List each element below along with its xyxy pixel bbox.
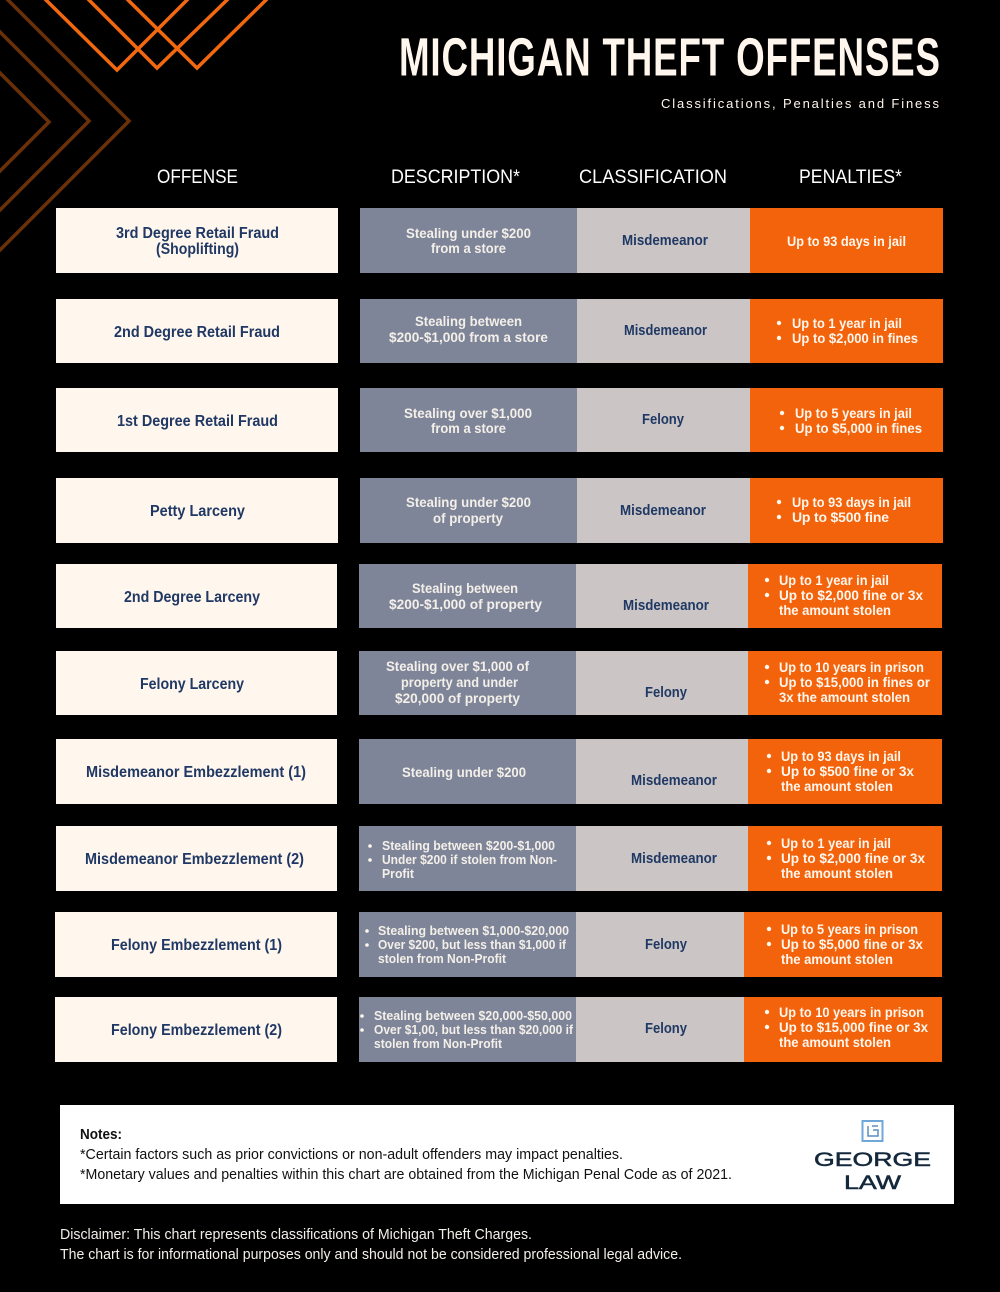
description cell [360, 208, 577, 273]
description cell [359, 912, 576, 977]
classification cell: Misdemeanor [624, 323, 707, 339]
icon: logo square [862, 1121, 882, 1141]
description cell: Stealing under $200 [402, 764, 526, 780]
penalties cell [744, 912, 942, 977]
description cell: $20,000 of property [395, 690, 520, 706]
description cell [359, 826, 576, 891]
description cell: Profit [382, 866, 415, 881]
classification cell [577, 208, 750, 273]
description cell: stolen from Non-Profit [374, 1036, 503, 1051]
offense cell [56, 478, 338, 543]
offense cell: 1st Degree Retail Fraud [117, 413, 278, 430]
description cell: Stealing under $200 [406, 225, 531, 241]
column headers [157, 167, 903, 188]
classification cell: Misdemeanor [620, 503, 706, 519]
description cell [359, 651, 576, 715]
description cell: Stealing between [412, 580, 518, 596]
offense cell: 2nd Degree Retail Fraud [114, 324, 280, 341]
description cell: Over $1,00, but less than $20,000 if [374, 1022, 574, 1037]
description cell: Stealing under $200 [406, 494, 531, 510]
description cell [360, 388, 577, 452]
classification cell [576, 739, 748, 804]
classification cell [577, 299, 750, 363]
offense cell [56, 651, 337, 715]
note 1: *Certain factors such as prior convictions or non-adult offenders may impact penalties. [80, 1147, 623, 1163]
description cell [360, 478, 577, 543]
description cell [359, 564, 576, 628]
penalties cell: Up to 10 years in prison [779, 659, 924, 675]
penalties cell [744, 997, 942, 1062]
penalties cell: the amount stolen [781, 951, 893, 967]
offense cell [56, 388, 338, 452]
penalties cell: the amount stolen [781, 865, 893, 881]
penalties cell: Up to $5,000 fine or 3x [781, 936, 923, 952]
offense cell: 3rd Degree Retail Fraud [116, 225, 279, 242]
classification cell [576, 651, 748, 715]
header: penalties: PENALTIES* [799, 167, 903, 188]
row 10: felony embezzlement 2 [55, 997, 942, 1062]
logo: George Law [814, 1121, 931, 1194]
row 3: 1st degree retail fraud [56, 388, 943, 452]
penalties cell: Up to 5 years in jail [795, 405, 912, 421]
penalties cell: Up to $500 fine or 3x [781, 763, 914, 779]
offense cell [56, 564, 337, 628]
description cell: Stealing between $20,000-$50,000 [374, 1008, 572, 1023]
penalties cell [748, 564, 942, 628]
panel: notes [60, 1105, 954, 1204]
offense cell [55, 997, 337, 1062]
penalties cell: Up to 10 years in prison [779, 1004, 924, 1020]
disclaimer: Disclaimer: This chart represents classifications of Michigan Theft Charges. [60, 1227, 532, 1243]
penalties cell: Up to $2,000 fine or 3x [781, 850, 925, 866]
logo wordmark: George: GEORGE [814, 1150, 931, 1171]
penalties cell: Up to $500 fine [792, 509, 889, 525]
classification cell [577, 478, 750, 543]
header: offense: OFFENSE [157, 167, 238, 188]
offense cell: Petty Larceny [150, 503, 245, 520]
offense cell: Felony Embezzlement (1) [111, 937, 282, 954]
description cell: from a store [431, 420, 506, 436]
row 5: 2nd degree larceny [56, 564, 942, 628]
description cell: stolen from Non-Profit [378, 951, 507, 966]
description cell: Stealing over $1,000 [404, 405, 532, 421]
classification cell [577, 388, 750, 452]
decoration: orange chevrons [45, 0, 267, 70]
classification cell: Felony [645, 1021, 687, 1037]
disclaimer: The chart is for informational purposes only and should not be considered professional legal advice. [60, 1247, 682, 1263]
description cell [359, 739, 576, 804]
classification cell: Felony [642, 412, 684, 428]
decoration: brown chevrons [0, 0, 129, 252]
row 8: misdemeanor embezzlement 2 [56, 826, 942, 891]
row 2: 2nd degree retail fraud [56, 299, 943, 363]
description cell: Over $200, but less than $1,000 if [378, 937, 567, 952]
offense cell: 2nd Degree Larceny [124, 589, 260, 606]
penalties cell [748, 651, 942, 715]
description cell: Stealing between $1,000-$20,000 [378, 923, 569, 938]
disclaimer [60, 1227, 682, 1263]
offense cell [56, 739, 337, 804]
penalties cell [750, 299, 943, 363]
description cell: Stealing between [415, 313, 522, 329]
classification cell: Felony [645, 685, 687, 701]
offense cell [55, 912, 337, 977]
header: description: DESCRIPTION* [391, 167, 521, 188]
notes heading: Notes: [80, 1127, 122, 1143]
row 7: misdemeanor embezzlement 1 [56, 739, 942, 804]
penalties cell: the amount stolen [779, 602, 891, 618]
classification cell: Misdemeanor [623, 598, 709, 614]
description cell: property and under [401, 674, 518, 690]
offense cell [56, 826, 337, 891]
penalties cell: Up to 1 year in jail [792, 315, 902, 331]
description cell: of property [433, 510, 503, 526]
description cell: Under $200 if stolen from Non- [382, 852, 557, 867]
penalties cell [748, 739, 942, 804]
description cell: Stealing over $1,000 of [386, 658, 529, 674]
penalties cell: Up to 1 year in jail [779, 572, 889, 588]
penalties cell [750, 388, 943, 452]
penalties cell: Up to 1 year in jail [781, 835, 891, 851]
row 9: felony embezzlement 1 [55, 912, 942, 977]
penalties cell: Up to $2,000 fine or 3x [779, 587, 923, 603]
row 6: felony larceny [56, 651, 942, 715]
header: classification: CLASSIFICATION [579, 167, 727, 188]
classification cell: Misdemeanor [631, 773, 717, 789]
description cell [359, 997, 576, 1062]
penalties cell: Up to $5,000 in fines [795, 420, 922, 436]
offense cell [56, 299, 338, 363]
classification cell [576, 826, 748, 891]
subtitle: Classifications, Penalties and Finess [661, 96, 940, 111]
penalties cell [750, 208, 943, 273]
classification cell: Felony [645, 937, 687, 953]
penalties cell: Up to $2,000 in fines [792, 330, 918, 346]
description cell: Stealing between $200-$1,000 [382, 838, 555, 853]
penalties cell [750, 478, 943, 543]
penalties cell: the amount stolen [779, 1034, 891, 1050]
offense cell: Misdemeanor Embezzlement (1) [86, 764, 306, 781]
description cell [360, 299, 577, 363]
row 4: petty larceny [56, 478, 943, 543]
offense cell: Felony Embezzlement (2) [111, 1022, 282, 1039]
penalties cell: Up to $15,000 fine or 3x [779, 1019, 928, 1035]
penalties cell: Up to $15,000 in fines or [779, 674, 931, 690]
penalties cell: Up to 5 years in prison [781, 921, 918, 937]
offense cell: Misdemeanor Embezzlement (2) [85, 851, 304, 868]
penalties cell [748, 826, 942, 891]
penalties cell: Up to 93 days in jail [781, 748, 901, 764]
classification cell [576, 564, 748, 628]
classification cell [576, 912, 744, 977]
penalties cell: 3x the amount stolen [779, 689, 910, 705]
offense cell: (Shoplifting) [156, 241, 239, 258]
classification cell: Misdemeanor [622, 233, 708, 249]
classification cell [576, 997, 744, 1062]
description cell: $200-$1,000 of property [389, 596, 542, 612]
logo wordmark: Law: LAW [844, 1173, 901, 1194]
title: MICHIGAN THEFT OFFENSES [399, 26, 940, 87]
description cell: $200-$1,000 from a store [389, 329, 548, 345]
classification cell: Misdemeanor [631, 851, 717, 867]
penalties cell: Up to 93 days in jail [792, 494, 911, 510]
penalties cell: the amount stolen [781, 778, 893, 794]
penalties cell: Up to 93 days in jail [787, 233, 906, 249]
offense cell [56, 208, 338, 273]
offense cell: Felony Larceny [140, 676, 244, 693]
row 1: 3rd degree retail fraud [56, 208, 943, 273]
description cell: from a store [431, 240, 506, 256]
note 2: *Monetary values and penalties within this chart are obtained from the Michigan Penal Code as of 2021. [80, 1167, 732, 1183]
